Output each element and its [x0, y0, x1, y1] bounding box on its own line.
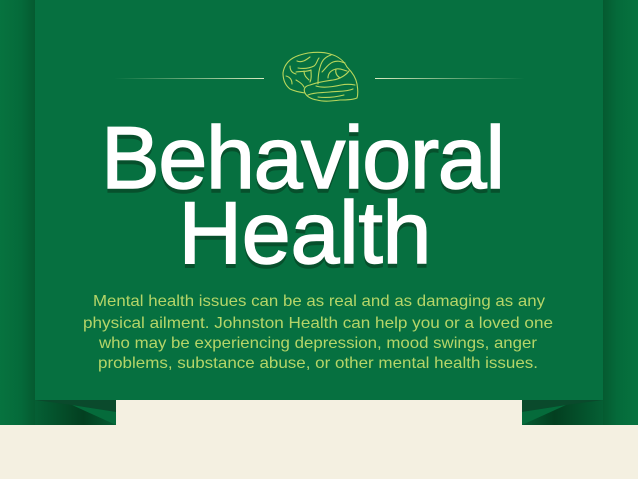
divider rule left	[114, 78, 264, 79]
description text: physical ailment. Johnston Health can help you or a loved one	[83, 315, 553, 332]
title text: Health	[178, 183, 432, 282]
description text: Mental health issues can be as real and as damaging as any	[93, 293, 545, 310]
title	[101, 108, 505, 286]
icon: brain	[283, 52, 358, 101]
title text	[101, 108, 505, 282]
main green panel	[35, 0, 603, 400]
description text: problems, substance abuse, or other mental health issues.	[98, 355, 538, 372]
title shadow	[101, 112, 505, 286]
title shadow: Behavioral	[101, 112, 505, 211]
description text	[83, 293, 553, 372]
description text: who may be experiencing depression, mood swings, anger	[98, 335, 538, 352]
left ribbon tail	[0, 0, 116, 425]
title text: Behavioral	[101, 108, 505, 207]
right ribbon tail	[522, 0, 638, 425]
title shadow: Health	[178, 187, 432, 286]
divider rule right	[375, 78, 525, 79]
